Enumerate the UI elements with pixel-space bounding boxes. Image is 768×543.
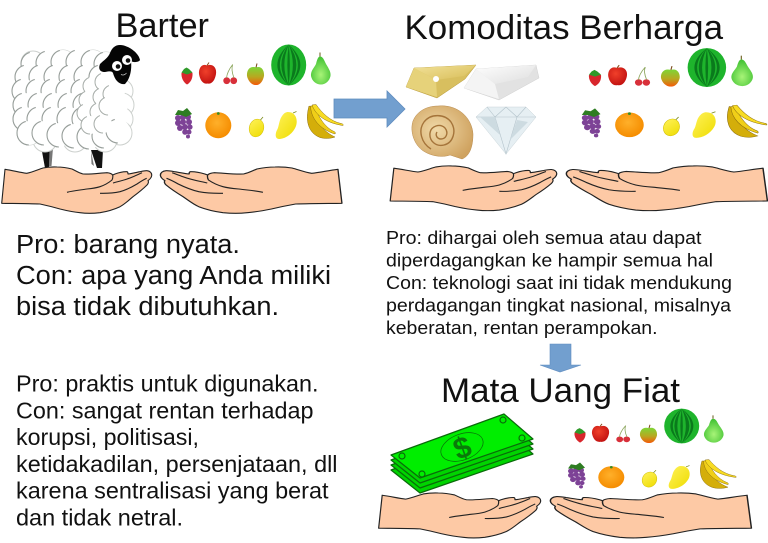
icon: left hand (390, 166, 557, 211)
icon: stack of banknotes (391, 414, 533, 493)
text: commodity pros and cons: Pro: dihargai oleh semua atau dapat (386, 227, 702, 248)
icon: right hand (550, 493, 751, 538)
text: barter pros and cons: Con: apa yang Anda miliki (16, 262, 331, 290)
icon: right hand (566, 166, 767, 211)
text: fiat pros and cons (16, 370, 338, 530)
arrow: barter to commodities (334, 91, 405, 127)
icon: right hand (160, 167, 342, 213)
icon: fruit assortment (568, 409, 736, 489)
title: Komoditas Berharga: Komoditas Berharga (404, 9, 724, 47)
title: Barter: Barter (116, 7, 209, 45)
title: Mata Uang Fiat: Mata Uang Fiat (441, 372, 680, 410)
text: fiat pros and cons: Pro: praktis untuk digunakan. (16, 370, 318, 396)
icon: silver bar (464, 65, 539, 100)
text: barter pros and cons: bisa tidak dibutuhkan. (16, 293, 279, 321)
text: barter pros and cons: Pro: barang nyata. (16, 231, 240, 259)
icon: left hand (2, 167, 152, 213)
text: commodity pros and cons: perdagangan tingkat nasional, misalnya (386, 294, 732, 316)
icon: sheep (12, 45, 140, 168)
text: fiat pros and cons: ketidakadilan, persenjataan, dll (16, 451, 338, 477)
icon: gold bar (406, 65, 476, 98)
text: fiat pros and cons: karena sentralisasi yang berat (16, 478, 329, 504)
text: commodity pros and cons: Con: teknologi saat ini tidak mendukung (386, 272, 732, 293)
text: fiat pros and cons: korupsi, politisasi, (16, 424, 199, 450)
text: barter pros and cons (16, 231, 331, 321)
icon: fruit assortment (582, 48, 767, 138)
text: commodity pros and cons: keberatan, rentan perampokan. (386, 317, 658, 338)
icon: fruit assortment (175, 44, 343, 139)
text: commodity pros and cons (386, 227, 732, 338)
panel: komoditas berharga (386, 9, 767, 338)
icon: left hand (379, 493, 541, 538)
icon: shell (412, 106, 473, 159)
panel: mata uang fiat (379, 372, 751, 538)
text: fiat pros and cons: dan tidak netral. (16, 504, 183, 530)
text: commodity pros and cons: diperdagangkan ke hampir semua hal (386, 250, 713, 270)
icon: diamond (476, 107, 536, 154)
text: fiat pros and cons: Con: sangat rentan terhadap (16, 398, 314, 424)
arrow: commodities to fiat (540, 344, 581, 372)
icon: stack of banknotes: $ (449, 430, 476, 467)
panel: barter (2, 7, 343, 321)
